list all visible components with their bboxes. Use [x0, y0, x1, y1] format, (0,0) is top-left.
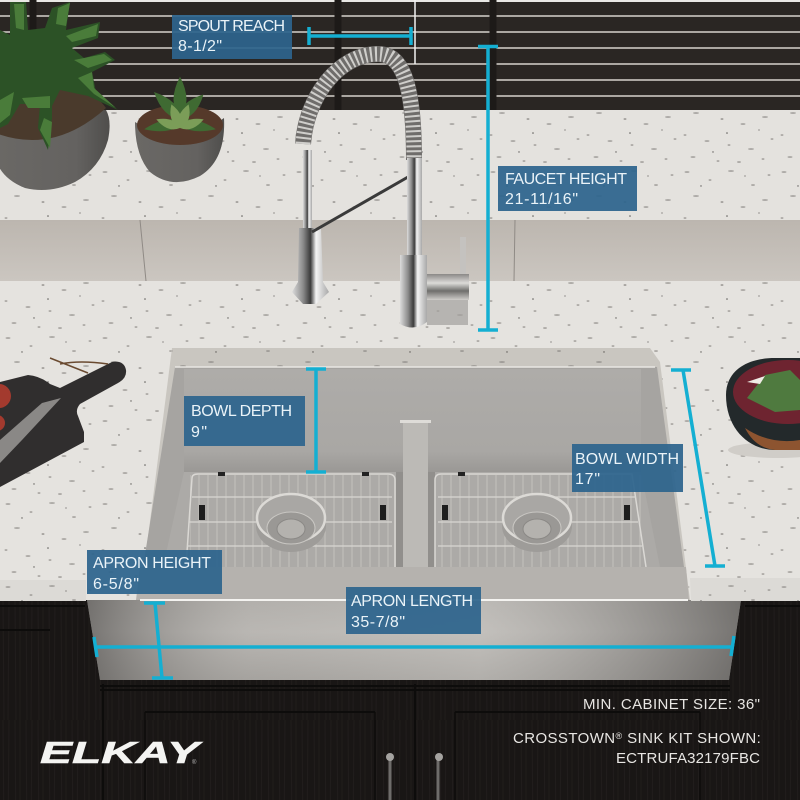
right grid and strainer [435, 472, 646, 567]
label: apron length [346, 587, 481, 634]
base [400, 255, 427, 328]
lower countertop [0, 281, 800, 601]
farmhouse sink [136, 348, 690, 600]
label: faucet height [498, 166, 637, 211]
spring spout [303, 54, 414, 160]
bowl interior side walls and floor [143, 367, 684, 567]
note: minimum cabinet size and kit model: SINK KIT SHOWN: [623, 730, 761, 747]
left grid and strainer [186, 472, 395, 567]
note: minimum cabinet size and kit model: MIN. CABINET SIZE: 36" [583, 696, 760, 713]
rim top line [175, 366, 655, 368]
label: apron height: APRON HEIGHT [93, 555, 211, 572]
sprayer holder [292, 228, 329, 304]
sprayer rod [303, 150, 312, 230]
label: faucet height: 21-11/16" [505, 191, 578, 208]
plant in grey pot [0, 2, 118, 190]
dark leaf mass [0, 2, 118, 150]
note: minimum cabinet size and kit model: ® [616, 731, 623, 741]
faucet [292, 54, 469, 328]
counter corner [0, 578, 800, 601]
logo: Elkay: ® [192, 759, 197, 766]
support arm [312, 177, 408, 232]
label: faucet height: FAUCET HEIGHT [505, 171, 627, 188]
label: bowl width [572, 444, 683, 492]
logo: Elkay: ELKAY [40, 735, 204, 770]
dimension: apron length line [94, 636, 734, 657]
apron top band [136, 567, 689, 600]
label: apron length: APRON LENGTH [351, 593, 473, 610]
note: minimum cabinet size and kit model: CROSSTOWN [513, 730, 616, 747]
note: minimum cabinet size and kit model [513, 696, 761, 767]
label: spout reach: SPOUT REACH [178, 18, 285, 35]
cabinet handles [386, 753, 443, 800]
dimension: bowl width line [671, 370, 725, 566]
label: spout reach [172, 15, 292, 59]
label: bowl depth: 9" [191, 424, 207, 441]
dimension: faucet height line [478, 46, 498, 330]
upper countertop [0, 110, 800, 220]
label: bowl width: BOWL WIDTH [575, 451, 679, 468]
light leaf highlights [0, 3, 116, 148]
base cabinets [0, 600, 800, 800]
logo: Elkay [40, 735, 204, 770]
label: apron length: 35-7/8" [351, 614, 405, 631]
tile backsplash [0, 220, 800, 281]
label: apron height: 6-5/8" [93, 576, 139, 593]
dimension: spout reach line [309, 27, 411, 45]
handle [425, 237, 469, 325]
centre divider [396, 420, 435, 567]
label: bowl depth [184, 396, 305, 446]
label: spout reach: 8-1/2" [178, 38, 222, 55]
note: minimum cabinet size and kit model: ECTRUFA32179FBC [616, 750, 760, 767]
bowl floor [163, 472, 660, 567]
label: bowl width: 17" [575, 471, 600, 488]
cutting board with knife [0, 358, 126, 487]
bowl with salad [726, 358, 800, 458]
label: bowl depth: BOWL DEPTH [191, 403, 292, 420]
bowl back wall [184, 369, 641, 472]
sink rim [140, 348, 690, 600]
dimension: apron height line [144, 603, 173, 678]
label: apron height [87, 550, 222, 594]
dimension: bowl depth line [306, 369, 326, 472]
apron front [87, 600, 741, 680]
background: dark slatted wall [0, 0, 800, 112]
main body [407, 158, 422, 258]
succulent in grey pot [135, 77, 224, 182]
